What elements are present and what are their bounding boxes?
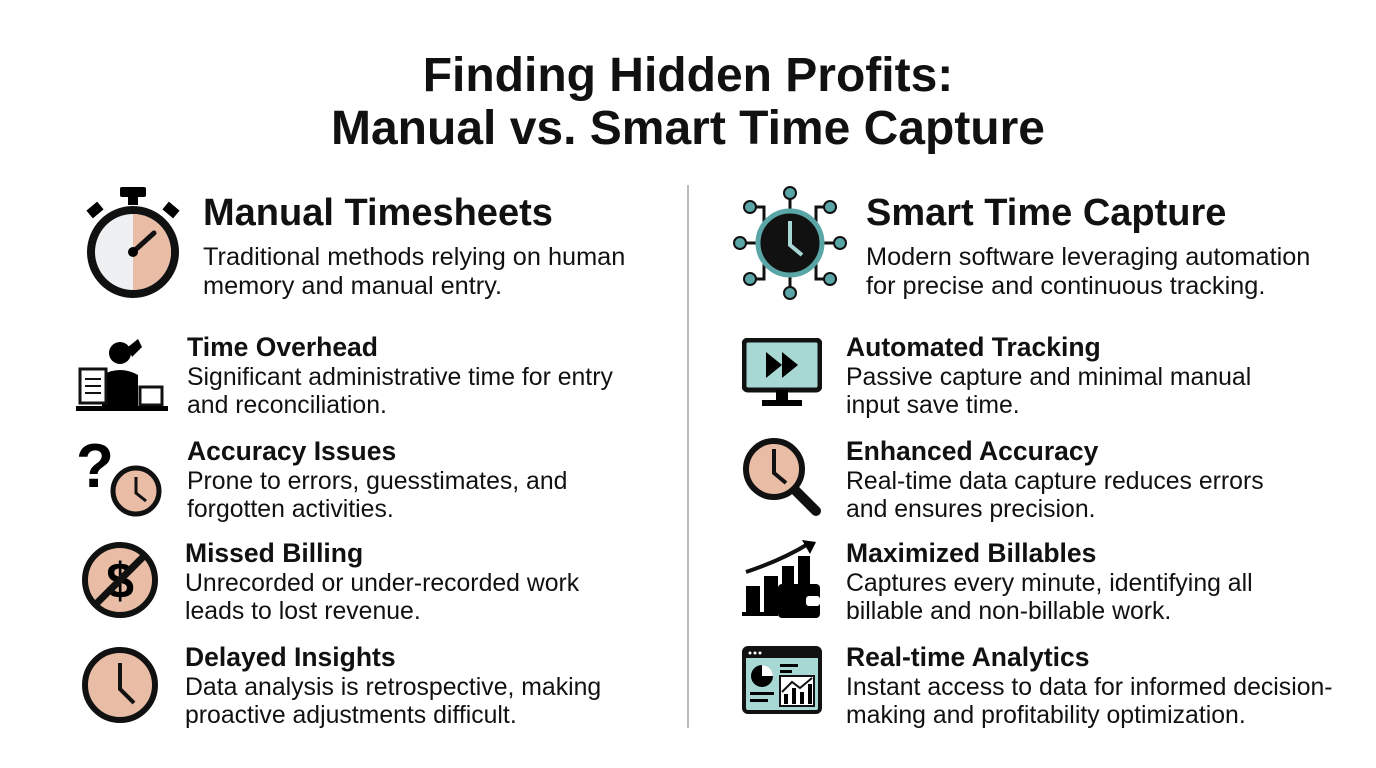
- item: Accuracy Issues: forgotten activities.: [187, 496, 394, 523]
- icon: dashboard: [742, 646, 822, 714]
- icon: magnifier clock: [743, 438, 821, 516]
- item: Real-time Analytics: [846, 642, 1333, 729]
- icon: question clock: [76, 435, 162, 516]
- item: Enhanced Accuracy: Enhanced Accuracy: [846, 436, 1098, 466]
- item: Maximized Billables: [846, 538, 1253, 625]
- title: [331, 49, 1045, 155]
- item: Accuracy Issues: [187, 436, 567, 523]
- item: Accuracy Issues: Prone to errors, guesstimates, and: [187, 468, 567, 495]
- title: Finding Hidden Profits:: [423, 49, 953, 102]
- item: Automated Tracking: Automated Tracking: [846, 332, 1101, 362]
- heading: Manual Timesheets: memory and manual entry.: [203, 272, 502, 300]
- icon: network clock: [733, 186, 847, 300]
- item: Automated Tracking: [846, 332, 1251, 419]
- title: Manual vs. Smart Time Capture: [331, 102, 1045, 155]
- heading: Manual Timesheets: Manual Timesheets: [203, 192, 553, 234]
- icon: growth wallet: [742, 540, 820, 618]
- heading: Smart Time Capture: Modern software leveraging automation: [866, 243, 1310, 271]
- item: Maximized Billables: Captures every minute, identifying all: [846, 570, 1253, 597]
- item: Delayed Insights: Data analysis is retrospective, making: [185, 674, 601, 701]
- item: Real-time Analytics: Real-time Analytics: [846, 642, 1090, 672]
- divider: [687, 185, 689, 728]
- item: Delayed Insights: Delayed Insights: [185, 642, 396, 672]
- item: Accuracy Issues: Accuracy Issues: [187, 436, 396, 466]
- item: Missed Billing: Unrecorded or under-recorded work: [185, 570, 579, 597]
- heading: Smart Time Capture: [866, 192, 1310, 300]
- item: Missed Billing: [185, 538, 580, 625]
- panel: smart: [733, 186, 1333, 729]
- item: Missed Billing: Missed Billing: [185, 538, 363, 568]
- item: Enhanced Accuracy: Real-time data capture reduces errors: [846, 468, 1264, 495]
- icon: clock: [82, 647, 158, 723]
- item: Real-time Analytics: making and profitability optimization.: [846, 702, 1246, 729]
- panel: manual: [76, 187, 625, 729]
- item: Maximized Billables: Maximized Billables: [846, 538, 1096, 568]
- item: Enhanced Accuracy: [846, 436, 1264, 523]
- heading: Smart Time Capture: Smart Time Capture: [866, 192, 1226, 234]
- heading: Smart Time Capture: for precise and continuous tracking.: [866, 272, 1265, 300]
- icon: stopwatch: [86, 187, 180, 298]
- item: Time Overhead: Significant administrative time for entry: [187, 364, 613, 391]
- item: Delayed Insights: [185, 642, 601, 729]
- item: Missed Billing: leads to lost revenue.: [185, 598, 421, 625]
- item: Enhanced Accuracy: and ensures precision.: [846, 496, 1096, 523]
- item: Time Overhead: and reconciliation.: [187, 392, 387, 419]
- heading: Manual Timesheets: [203, 192, 625, 300]
- icon: stressed worker: [76, 339, 168, 411]
- item: Maximized Billables: billable and non-billable work.: [846, 598, 1171, 625]
- item: Time Overhead: Time Overhead: [187, 332, 378, 362]
- item: Automated Tracking: Passive capture and minimal manual: [846, 364, 1251, 391]
- icon: no dollar: [82, 542, 158, 618]
- item: Automated Tracking: input save time.: [846, 392, 1020, 419]
- item: Real-time Analytics: Instant access to data for informed decision-: [846, 674, 1333, 701]
- heading: Manual Timesheets: Traditional methods relying on human: [203, 243, 625, 271]
- item: Time Overhead: [187, 332, 613, 419]
- icon: no dollar: $: [106, 553, 134, 609]
- icon: monitor: [742, 338, 822, 406]
- item: Delayed Insights: proactive adjustments difficult.: [185, 702, 517, 729]
